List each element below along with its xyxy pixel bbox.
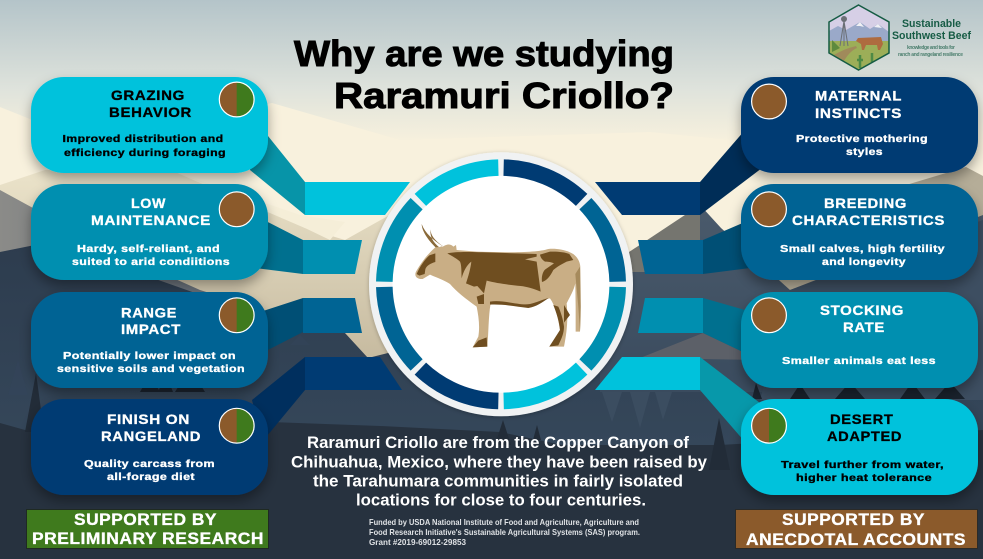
icon: brown circle — [752, 84, 786, 119]
logo text: ranch and rangeland resilience — [898, 52, 963, 58]
panel: low maintenance: MAINTENANCE — [91, 212, 211, 228]
connector: grazing behavior to ring — [250, 112, 410, 215]
logo text: knowledge and tools for — [907, 45, 955, 51]
panel: low maintenance — [31, 184, 268, 280]
panel: low maintenance: suited to arid condiitions — [72, 256, 230, 268]
panel: grazing behavior: BEHAVIOR — [109, 104, 192, 120]
legend: supported by preliminary research: PRELIMINARY RESEARCH — [32, 530, 264, 548]
text block: funding note: Food Research Initiative's Sustainable Agricultural Systems (SAS) program. — [369, 527, 640, 537]
lower trees — [8, 335, 310, 395]
connector: breeding characteristics to ring — [638, 222, 750, 274]
panel: range impact: sensitive soils and vegetation — [57, 363, 245, 375]
panel: low maintenance: Hardy, self-reliant, and — [77, 243, 220, 255]
text block: funding note: Grant #2019-69012-29853 — [369, 537, 466, 547]
panel: desert adapted: ADAPTED — [827, 428, 902, 444]
legend: supported by preliminary research: SUPPORTED BY — [74, 511, 217, 529]
icon: brown circle — [219, 192, 254, 227]
title: Why are we studying — [294, 33, 674, 74]
panel: maternal instincts: MATERNAL — [815, 88, 902, 104]
icon: brown circle — [752, 298, 786, 333]
legend: supported by anecdotal accounts: SUPPORTED BY — [782, 511, 925, 529]
icon: cow — [415, 224, 581, 347]
text block: origin description: locations for close to four centuries. — [356, 492, 646, 510]
icon: half brown half green circle — [219, 82, 254, 117]
panel: maternal instincts: INSTINCTS — [815, 105, 902, 121]
panel: finish on rangeland: Quality carcass from — [84, 458, 215, 470]
panel: desert adapted — [741, 399, 978, 495]
panel: grazing behavior — [31, 77, 268, 173]
icon: half brown half green circle — [752, 408, 786, 443]
logo text: Southwest Beef — [892, 30, 971, 42]
ring segments — [336, 119, 666, 449]
panel: stocking rate: STOCKING — [820, 302, 904, 318]
panel: grazing behavior: Improved distribution and — [62, 133, 224, 145]
panel: low maintenance: LOW — [131, 195, 166, 211]
panel: maternal instincts: Protective mothering — [796, 133, 928, 145]
text block: funding note: Funded by USDA National Institute of Food and Agriculture, Agriculture and — [369, 517, 639, 527]
text block: origin description: the Tarahumara communities in fairly isolated — [313, 473, 683, 491]
connector: stocking rate to ring — [638, 298, 745, 353]
panel: breeding characteristics: Small calves, high fertility — [780, 243, 945, 255]
panel: breeding characteristics: and longevity — [822, 256, 906, 268]
panel: breeding characteristics: BREEDING — [824, 195, 907, 211]
panel: maternal instincts — [741, 77, 978, 173]
panel: desert adapted: Travel further from water, — [781, 459, 944, 471]
panel: desert adapted: DESERT — [830, 411, 894, 427]
connector: maternal instincts to ring — [595, 130, 762, 215]
panel: finish on rangeland — [31, 399, 268, 495]
title — [294, 33, 674, 116]
connector: desert adapted to ring — [595, 357, 760, 442]
panel: breeding characteristics — [741, 184, 978, 280]
panel: stocking rate — [741, 292, 978, 388]
panel: range impact — [31, 292, 268, 388]
logo hexagon scene — [829, 5, 889, 70]
panel: desert adapted: higher heat tolerance — [796, 472, 932, 484]
text block: origin description: Raramuri Criollo are from the Copper Canyon of — [307, 434, 690, 452]
logo: Sustainable Southwest Beef — [829, 5, 971, 70]
panel: grazing behavior: GRAZING — [111, 87, 185, 103]
panel: finish on rangeland: RANGELAND — [101, 428, 201, 444]
text block: funding note — [369, 517, 640, 547]
centre ring with cow — [336, 119, 666, 449]
panel: finish on rangeland: all-forage diet — [107, 471, 195, 483]
panel: maternal instincts: styles — [846, 146, 883, 158]
legend: supported by preliminary research — [26, 510, 268, 548]
icon: half brown half green circle — [219, 408, 254, 443]
icon: brown circle — [752, 192, 786, 227]
connector: finish on rangeland to ring — [252, 357, 402, 442]
connector: range impact to ring — [260, 298, 362, 353]
logo text: Sustainable — [902, 18, 961, 30]
text block: origin description — [291, 434, 708, 510]
panel: grazing behavior: efficiency during foraging — [64, 147, 226, 159]
panel: range impact: IMPACT — [121, 321, 181, 337]
legend: supported by anecdotal accounts: ANECDOTAL ACCOUNTS — [746, 531, 966, 549]
logo text — [892, 18, 971, 58]
panel: range impact: Potentially lower impact on — [63, 350, 236, 362]
title: Raramuri Criollo? — [334, 75, 674, 116]
legend: supported by anecdotal accounts — [736, 510, 978, 549]
panel: finish on rangeland: FINISH ON — [107, 411, 190, 427]
panel: stocking rate: RATE — [843, 319, 885, 335]
panel: range impact: RANGE — [121, 304, 177, 320]
text block: origin description: Chihuahua, Mexico, where they have been raised by — [291, 454, 708, 472]
icon: half brown half green circle — [219, 298, 254, 333]
panel: breeding characteristics: CHARACTERISTICS — [792, 212, 945, 228]
connector: low maintenance to ring — [255, 218, 362, 274]
panel: stocking rate: Smaller animals eat less — [782, 355, 936, 367]
